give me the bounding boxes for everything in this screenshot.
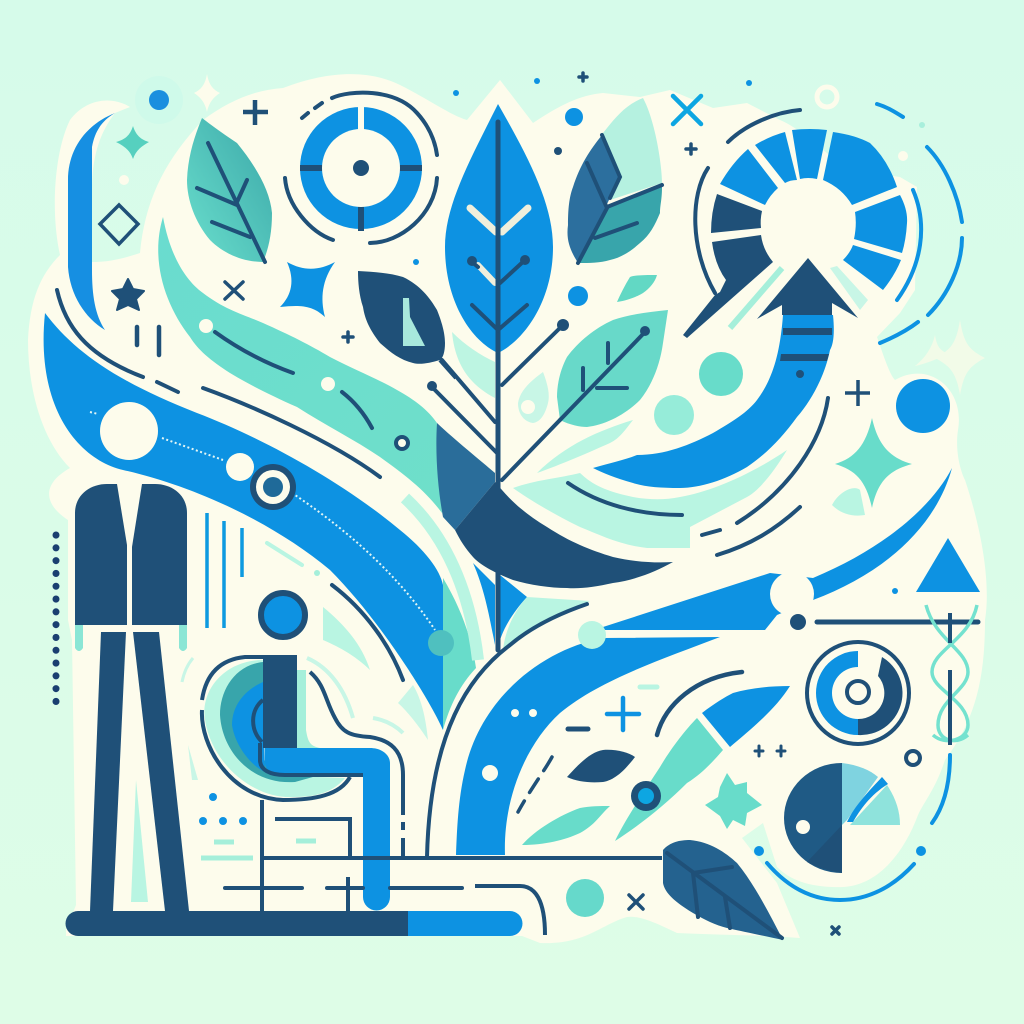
- top right leaf: [567, 98, 662, 263]
- teal drop: [518, 372, 549, 423]
- teal swoosh: [158, 217, 442, 513]
- small lower leaves: [522, 750, 635, 845]
- plus, minus and arc marks: [518, 672, 785, 812]
- pie chart: [784, 763, 900, 873]
- navy star: [112, 279, 144, 310]
- trousers: [90, 632, 189, 911]
- growth arrow: [593, 258, 858, 488]
- mint strip: [405, 498, 478, 660]
- teal spiky star: [705, 773, 762, 829]
- diamond outline: [100, 205, 138, 244]
- blue slivers by stem: [473, 563, 590, 650]
- navy plus top: [243, 100, 268, 125]
- dna helix: [926, 605, 977, 745]
- cream sparkles right: [915, 320, 985, 395]
- teal sparkle right: [835, 418, 912, 508]
- crescent at tree base: [436, 423, 673, 588]
- blue swoosh left: [44, 313, 443, 730]
- small teal leaf: [617, 275, 657, 302]
- pie orbit arcs: [767, 755, 950, 900]
- ring dot: [631, 781, 661, 811]
- mint dashes: [201, 841, 316, 858]
- teal circle bottom: [566, 879, 604, 917]
- short vertical lines: [137, 327, 159, 355]
- teal brush handle: [615, 718, 723, 841]
- teal leaf mid right: [557, 310, 668, 427]
- mint shard by arrow: [830, 266, 868, 310]
- navy big leaf bottom: [663, 840, 783, 940]
- arcs and shards mid-left: [182, 585, 428, 780]
- dotted lines on swoosh: [90, 412, 435, 630]
- lower right blue band: [456, 468, 952, 855]
- blue brush head: [702, 686, 790, 747]
- navy small leaf: [358, 271, 456, 378]
- tree stem and branches: [427, 122, 645, 857]
- short arcs under arrow: [568, 398, 828, 555]
- teal strip below swoosh: [443, 578, 476, 730]
- mint dash mid left: [267, 543, 302, 565]
- small blue dot by triangle: [892, 588, 898, 594]
- blue x top: [673, 96, 701, 124]
- small ring near pie: [906, 751, 920, 765]
- thin vertical lines: [207, 513, 242, 628]
- teal sparkle top left: [116, 126, 149, 159]
- chair and floor lines: [225, 800, 662, 935]
- jacket: [75, 484, 187, 651]
- small mint sweep: [537, 420, 633, 473]
- small mint leaf beside stem: [452, 332, 495, 398]
- teal leaf top left: [187, 118, 272, 262]
- plus sign right: [845, 380, 870, 406]
- band nodes: [482, 572, 978, 781]
- branch end dots: [427, 255, 569, 391]
- segmented gear: [683, 129, 907, 338]
- central blue leaf: [445, 104, 553, 353]
- swoosh nodes: [100, 319, 454, 656]
- dotted vertical: [52, 535, 60, 702]
- mint fragment right: [832, 488, 865, 516]
- seated figure: [202, 593, 403, 910]
- mint dot mid left: [314, 570, 320, 576]
- swoosh dashes: [57, 290, 380, 477]
- cream backdrop blob: [28, 74, 987, 943]
- target lower right: [807, 642, 909, 744]
- small blue dots left: [199, 793, 247, 825]
- left blue bracket: [68, 113, 115, 330]
- mint bar by arrow: [730, 268, 782, 328]
- mint sweep under arrow: [513, 450, 787, 548]
- ground bar: [66, 911, 522, 936]
- halo behind top left dot: [135, 76, 183, 124]
- small x and plus marks: [225, 73, 839, 934]
- target icon top: [285, 93, 437, 243]
- pie orbit dots: [754, 846, 926, 856]
- blue triangle: [916, 538, 980, 592]
- cream sparkle top left: [194, 74, 220, 112]
- cream veins in leaf: [470, 208, 528, 283]
- blue four point sparkle: [280, 262, 335, 317]
- circles and dots: [119, 78, 950, 435]
- gear rings: [695, 104, 962, 343]
